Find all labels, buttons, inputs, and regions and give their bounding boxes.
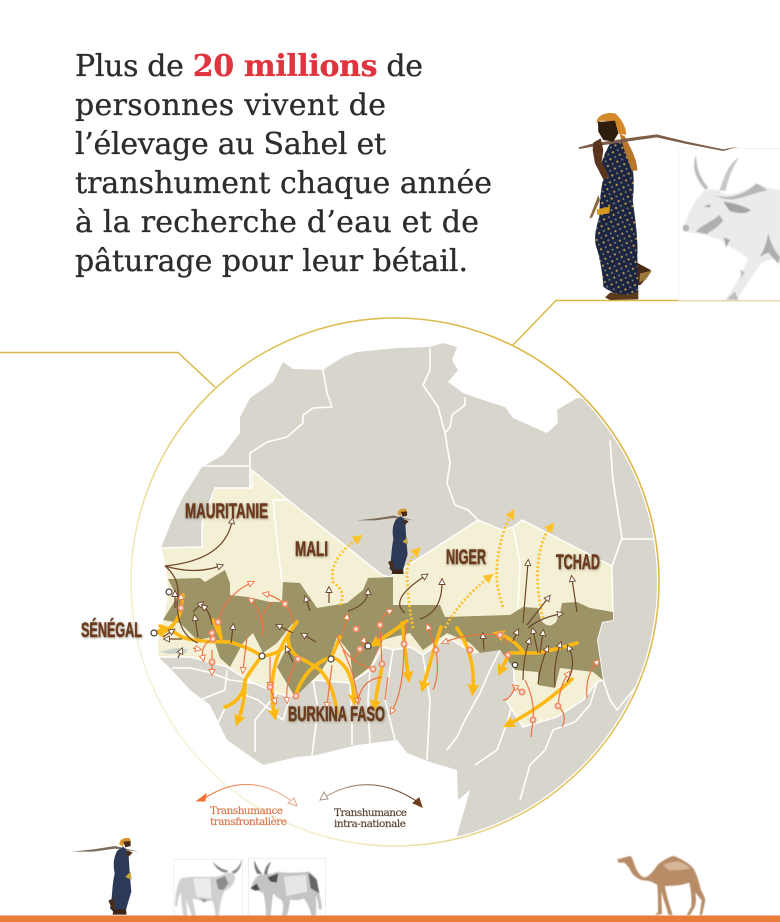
arrows: yellow cross-border corridors	[160, 595, 577, 723]
country borders: Sahel	[273, 500, 520, 607]
markers: origin points	[151, 589, 561, 723]
title: à la recherche d’eau et de	[75, 205, 479, 240]
arrows: yellow dotted	[332, 515, 550, 628]
icon: bottom cow, facing left	[248, 858, 326, 917]
label: Tchad: TCHAD	[556, 551, 600, 574]
icon: herder woman, bottom	[72, 838, 138, 915]
legend: cross-border transhumance: Transhumance	[210, 805, 283, 817]
icon: herder woman, top right	[578, 113, 738, 300]
icon: herder woman on map	[357, 509, 414, 574]
Sahel countries: pale area	[157, 470, 613, 727]
legend: cross-border transhumance: transfrontalière	[210, 816, 287, 828]
legend: internal transhumance	[320, 785, 422, 830]
map	[80, 317, 660, 847]
label: Niger: NIGER	[446, 546, 486, 569]
leader line: left	[0, 352, 215, 387]
arrows: orange cross-border	[181, 583, 597, 737]
leader line: right	[513, 300, 780, 345]
title: personnes vivent de	[75, 88, 386, 123]
title: l’élevage au Sahel et	[75, 127, 386, 162]
title: Plus de 20 millions de	[75, 49, 423, 84]
agro-pastoral zone: brown band	[163, 570, 613, 697]
label: Mauritanie: MAURITANIE	[185, 500, 268, 523]
river: Senegal coast	[160, 648, 188, 654]
icon: camel	[617, 856, 705, 915]
map circle outline	[131, 318, 659, 846]
icon: bottom cow, facing right	[174, 859, 243, 917]
label: Sénégal: SÉNÉGAL	[81, 619, 142, 642]
country borders: north and south	[172, 348, 660, 800]
label: Burkina Faso: BURKINA FASO	[288, 703, 385, 726]
title	[75, 49, 492, 279]
label: Mali: MALI	[295, 538, 328, 561]
arrows: brown internal	[163, 521, 577, 687]
legend: cross-border transhumance	[197, 784, 297, 828]
legend: internal transhumance: Transhumance	[334, 807, 407, 819]
icon: cow, top right	[679, 148, 780, 300]
legend: internal transhumance: intra-nationale	[334, 818, 406, 830]
cut-out in band, Chad	[538, 608, 560, 626]
title: pâturage pour leur bétail.	[75, 244, 468, 279]
title: transhument chaque année	[75, 166, 492, 201]
bottom bar	[0, 916, 780, 922]
land: grey surrounding countries	[158, 343, 657, 836]
